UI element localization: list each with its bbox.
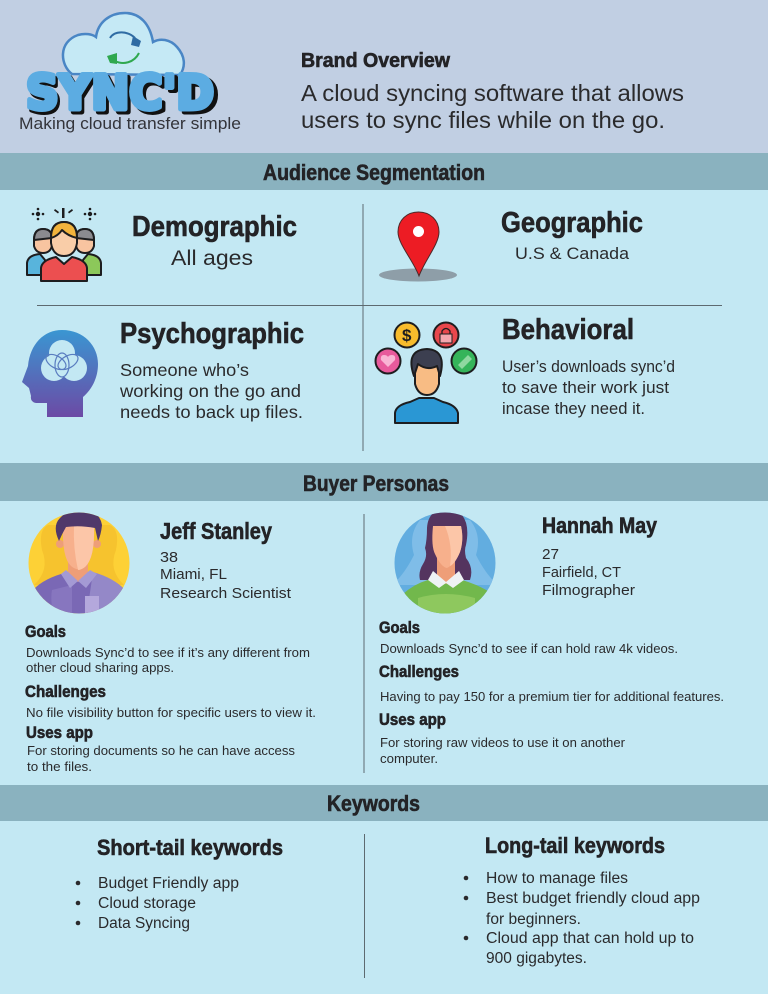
Hannah goals: Downloads Sync’d to see if can hold raw 4k videos.: [380, 641, 678, 656]
Jeff details: Miami, FL: [160, 566, 227, 583]
behavioral text: incase they need it.: [502, 400, 645, 418]
brand overview description: A cloud syncing software that allows: [301, 80, 684, 106]
long-tail list: How to manage files: [486, 870, 628, 887]
panel: short-tail keywords: [76, 835, 283, 932]
Hannah uses app: For storing raw videos to use it on another: [380, 735, 626, 750]
Hannah uses app: Uses app: [379, 711, 446, 729]
section band: keywords: Keywords: [327, 791, 420, 816]
demographic heading: Demographic: [132, 211, 297, 243]
logo wordmark shadow and fill: SYNC'D: [26, 66, 214, 121]
behavioral text: [502, 358, 675, 418]
section band: keywords: [0, 785, 768, 821]
header panel: [0, 0, 768, 153]
Jeff uses app: to the files.: [27, 759, 92, 774]
persona divider: [363, 514, 365, 773]
Hannah uses app: [379, 711, 626, 766]
icon: map pin: [379, 212, 457, 282]
behavioral heading: Behavioral: [502, 314, 634, 346]
long-tail list: Cloud app that can hold up to: [486, 930, 694, 947]
panel: long-tail keywords: [464, 833, 700, 967]
Jeff goals: other cloud sharing apps.: [26, 660, 174, 675]
Hannah challenges: [379, 663, 724, 704]
short-tail list: Budget Friendly app: [98, 875, 239, 892]
Jeff challenges: No file visibility button for specific users to view it.: [26, 705, 316, 720]
section band: audience segmentation: Audience Segmentation: [263, 160, 485, 185]
panel: behavioral: [376, 314, 675, 423]
logo wordmark shadow and fill: SYNC'D: [28, 69, 218, 124]
Jeff challenges: Challenges: [25, 683, 106, 701]
icon: people group: [27, 208, 101, 281]
logo tagline: Making cloud transfer simple: [19, 115, 241, 133]
behavioral text: User’s downloads sync’d: [502, 358, 675, 376]
Hannah details: [542, 546, 635, 599]
psychographic text: [119, 360, 303, 422]
panel: persona Hannah May: [379, 508, 724, 766]
panel: demographic: [27, 208, 297, 281]
keywords divider: [364, 834, 366, 978]
logo: [19, 13, 241, 133]
icon: head with circles: [22, 330, 98, 417]
icon: Jeff avatar: [28, 509, 130, 620]
icon: Hannah avatar: [394, 512, 496, 614]
geographic text: U.S & Canada: [515, 244, 630, 263]
Jeff uses app: Uses app: [26, 724, 93, 742]
short-tail list: [76, 875, 239, 932]
brand overview description: [301, 80, 684, 133]
Jeff goals: Goals: [25, 623, 66, 641]
Jeff details: [160, 549, 292, 602]
psychographic text: working on the go and: [119, 381, 301, 401]
panel: persona Jeff Stanley: [25, 509, 316, 774]
Jeff details: 38: [160, 549, 178, 566]
Jeff goals: Downloads Sync’d to see if it’s any different from: [26, 645, 310, 660]
behavioral text: to save their work just: [502, 379, 669, 397]
icon: person with thought bubbles: $: [402, 326, 412, 345]
Hannah uses app: computer.: [380, 751, 438, 766]
long-tail list: 900 gigabytes.: [486, 950, 587, 967]
icon: person with thought bubbles: [376, 322, 476, 423]
Hannah goals: [379, 619, 678, 656]
psychographic text: Someone who’s: [120, 360, 249, 380]
short-tail list: Data Syncing: [98, 915, 190, 932]
psychographic heading: Psychographic: [120, 318, 304, 350]
short-tail list: Cloud storage: [98, 895, 196, 912]
Jeff uses app: [26, 724, 295, 774]
panel: psychographic: [22, 318, 304, 422]
Hannah details: Filmographer: [542, 582, 635, 599]
Hannah challenges: Challenges: [379, 663, 459, 681]
long-tail heading: Long-tail keywords: [485, 833, 665, 858]
geographic heading: Geographic: [501, 207, 643, 239]
Hannah goals: Goals: [379, 619, 420, 637]
Hannah challenges: Having to pay 150 for a premium tier for additional features.: [380, 689, 724, 704]
icon: cloud: [63, 13, 184, 75]
Jeff name: Jeff Stanley: [160, 518, 272, 544]
long-tail list: for beginners.: [486, 911, 581, 928]
demographic text: All ages: [171, 246, 253, 270]
panel: geographic: [379, 207, 643, 282]
Hannah details: Fairfield, CT: [542, 564, 621, 581]
long-tail list: Best budget friendly cloud app: [486, 890, 700, 907]
brand overview heading: Brand Overview: [301, 50, 450, 72]
long-tail list: [464, 870, 700, 967]
section band: buyer personas: Buyer Personas: [303, 471, 449, 496]
brand overview description: users to sync files while on the go.: [301, 107, 665, 133]
Jeff uses app: For storing documents so he can have access: [27, 743, 295, 758]
divider lines: [37, 204, 722, 451]
section band: buyer personas: [0, 463, 768, 501]
psychographic text: needs to back up files.: [120, 402, 303, 422]
Hannah details: 27: [542, 546, 559, 563]
Jeff goals: [25, 623, 310, 675]
Jeff details: Research Scientist: [160, 585, 292, 602]
Jeff challenges: [25, 683, 316, 720]
Hannah name: Hannah May: [542, 513, 658, 538]
short-tail heading: Short-tail keywords: [97, 835, 283, 860]
section band: audience segmentation: [0, 153, 768, 190]
